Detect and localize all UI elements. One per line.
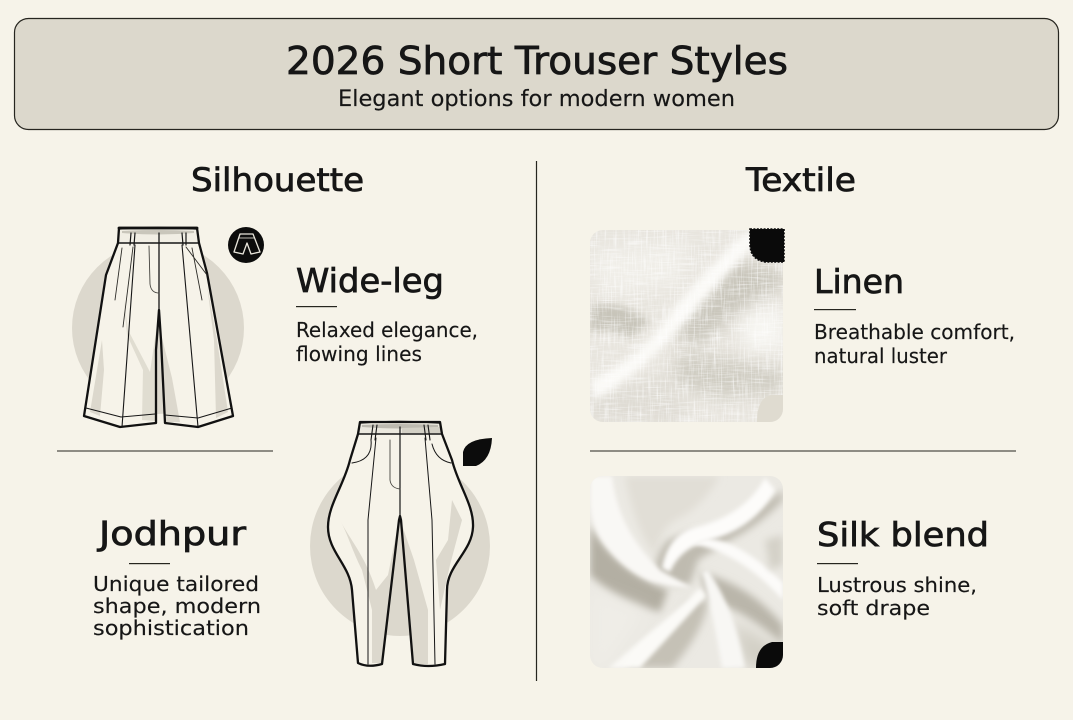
- panel: jodhpur illustration: [310, 422, 490, 666]
- label: Linen: Linen: [814, 262, 904, 301]
- label: Wide-leg: Wide-leg: [296, 261, 444, 300]
- title: 2026 Short Trouser Styles: [286, 39, 788, 83]
- subtitle: Elegant options for modern women: [338, 87, 735, 112]
- block: wide-leg text: [296, 261, 478, 366]
- description: jodhpur: shape, modern: [93, 594, 261, 618]
- backdrop circle: [72, 242, 244, 414]
- label: Silk blend: Silk blend: [817, 515, 989, 554]
- block: linen text: [814, 262, 1015, 368]
- description: jodhpur: Unique tailored: [93, 572, 259, 596]
- description: jodhpur: sophistication: [93, 616, 249, 640]
- corner accent: black: [756, 642, 783, 668]
- corner accent: light: [757, 395, 783, 422]
- panel: linen swatch: [590, 230, 783, 422]
- title banner: [14, 18, 1058, 130]
- jodhpur trousers: [328, 422, 473, 666]
- heading: Silhouette: Silhouette: [191, 161, 364, 199]
- description: silk: soft drape: [817, 596, 930, 620]
- backdrop circle: [310, 456, 490, 636]
- description: wide-leg: flowing lines: [296, 342, 422, 366]
- description: linen: natural luster: [814, 344, 948, 368]
- description: linen: Breathable comfort,: [814, 320, 1015, 344]
- heading: Textile: Textile: [745, 161, 856, 199]
- panel: silk swatch: [590, 476, 783, 668]
- label: Jodhpur: Jodhpur: [97, 514, 246, 553]
- block: jodhpur text: [93, 514, 261, 640]
- icon: shorts badge: [228, 227, 264, 263]
- description: silk: Lustrous shine,: [817, 573, 977, 597]
- icon: linen black corner: [750, 229, 784, 262]
- wide-leg trousers: [84, 228, 233, 427]
- panel: wide-leg illustration: [72, 228, 244, 427]
- block: silk text: [817, 515, 989, 620]
- description: wide-leg: Relaxed elegance,: [296, 318, 478, 342]
- icon: leaf badge: [463, 438, 492, 466]
